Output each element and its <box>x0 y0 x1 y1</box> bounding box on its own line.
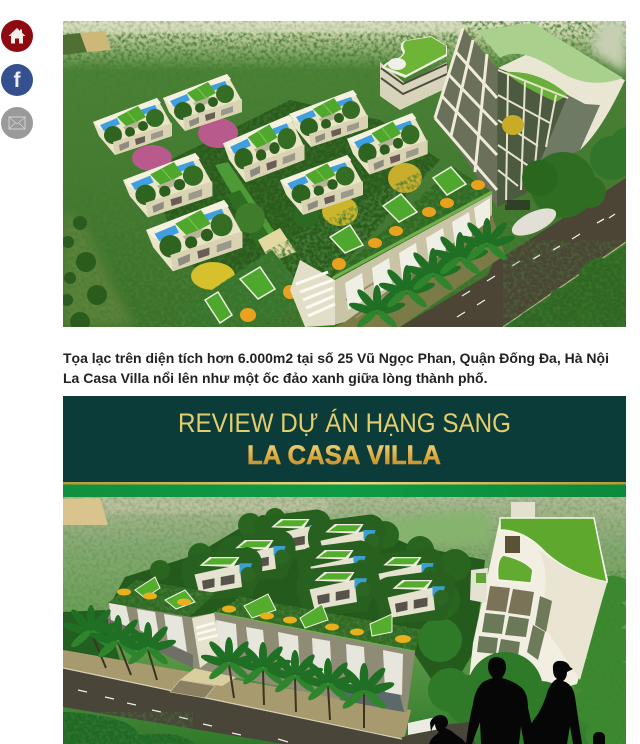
navigation icons <box>1 20 33 139</box>
villa 4 <box>146 200 242 271</box>
road and sidewalk <box>63 650 475 744</box>
terrace houses facade <box>290 194 492 327</box>
banner title line 1: REVIEW DỰ ÁN HẠNG SANG <box>178 408 511 438</box>
aerial render: villas from above <box>61 20 640 333</box>
silhouette family <box>429 657 605 744</box>
terrace houses rooftop <box>182 165 494 327</box>
banner <box>63 396 626 498</box>
trees below tower <box>418 619 552 723</box>
villas <box>93 74 428 271</box>
villa 2 <box>163 74 242 131</box>
villa 6 <box>280 155 363 215</box>
flower gardens <box>132 118 422 290</box>
villa 5 <box>223 115 304 182</box>
front terrace roofs <box>108 577 421 652</box>
icon: mail button <box>1 107 33 139</box>
foreground trees, lower left <box>63 712 195 744</box>
icon: facebook button: f <box>14 69 22 92</box>
woman <box>532 660 582 744</box>
foliage mass behind buildings <box>63 508 485 679</box>
palm trees <box>348 218 516 330</box>
child <box>429 715 467 744</box>
hazy landscape background <box>63 497 626 744</box>
villa 1 <box>93 98 172 155</box>
forest background <box>61 21 626 332</box>
man <box>466 657 537 744</box>
villa 8 <box>347 113 428 175</box>
front terrace facade <box>108 603 415 712</box>
rooftop villas <box>181 509 455 624</box>
left annex building <box>380 36 447 110</box>
villa 3 <box>123 153 212 217</box>
front palm trees <box>62 605 396 728</box>
road <box>335 178 635 333</box>
caption text <box>63 350 609 386</box>
banner title line 2: LA CASA VILLA <box>247 440 441 470</box>
aerial render: street view of project <box>62 497 640 744</box>
small child <box>593 732 605 744</box>
icon: home button <box>1 20 33 52</box>
right side trees <box>572 570 626 744</box>
caption text: Tọa lạc trên diện tích hơn 6.000m2 tại số 25 Vũ Ngọc Phan, Quận Đống Đa, Hà Nội <box>63 350 609 366</box>
dark foliage between villas <box>164 100 440 278</box>
central garden path <box>215 162 319 262</box>
main tower <box>433 20 626 207</box>
large trees by tower <box>505 127 626 236</box>
caption text: La Casa Villa nổi lên như một ốc đảo xanh giữa lòng thành phố. <box>63 370 488 386</box>
villa 7 <box>289 90 368 147</box>
second tower <box>470 502 608 686</box>
